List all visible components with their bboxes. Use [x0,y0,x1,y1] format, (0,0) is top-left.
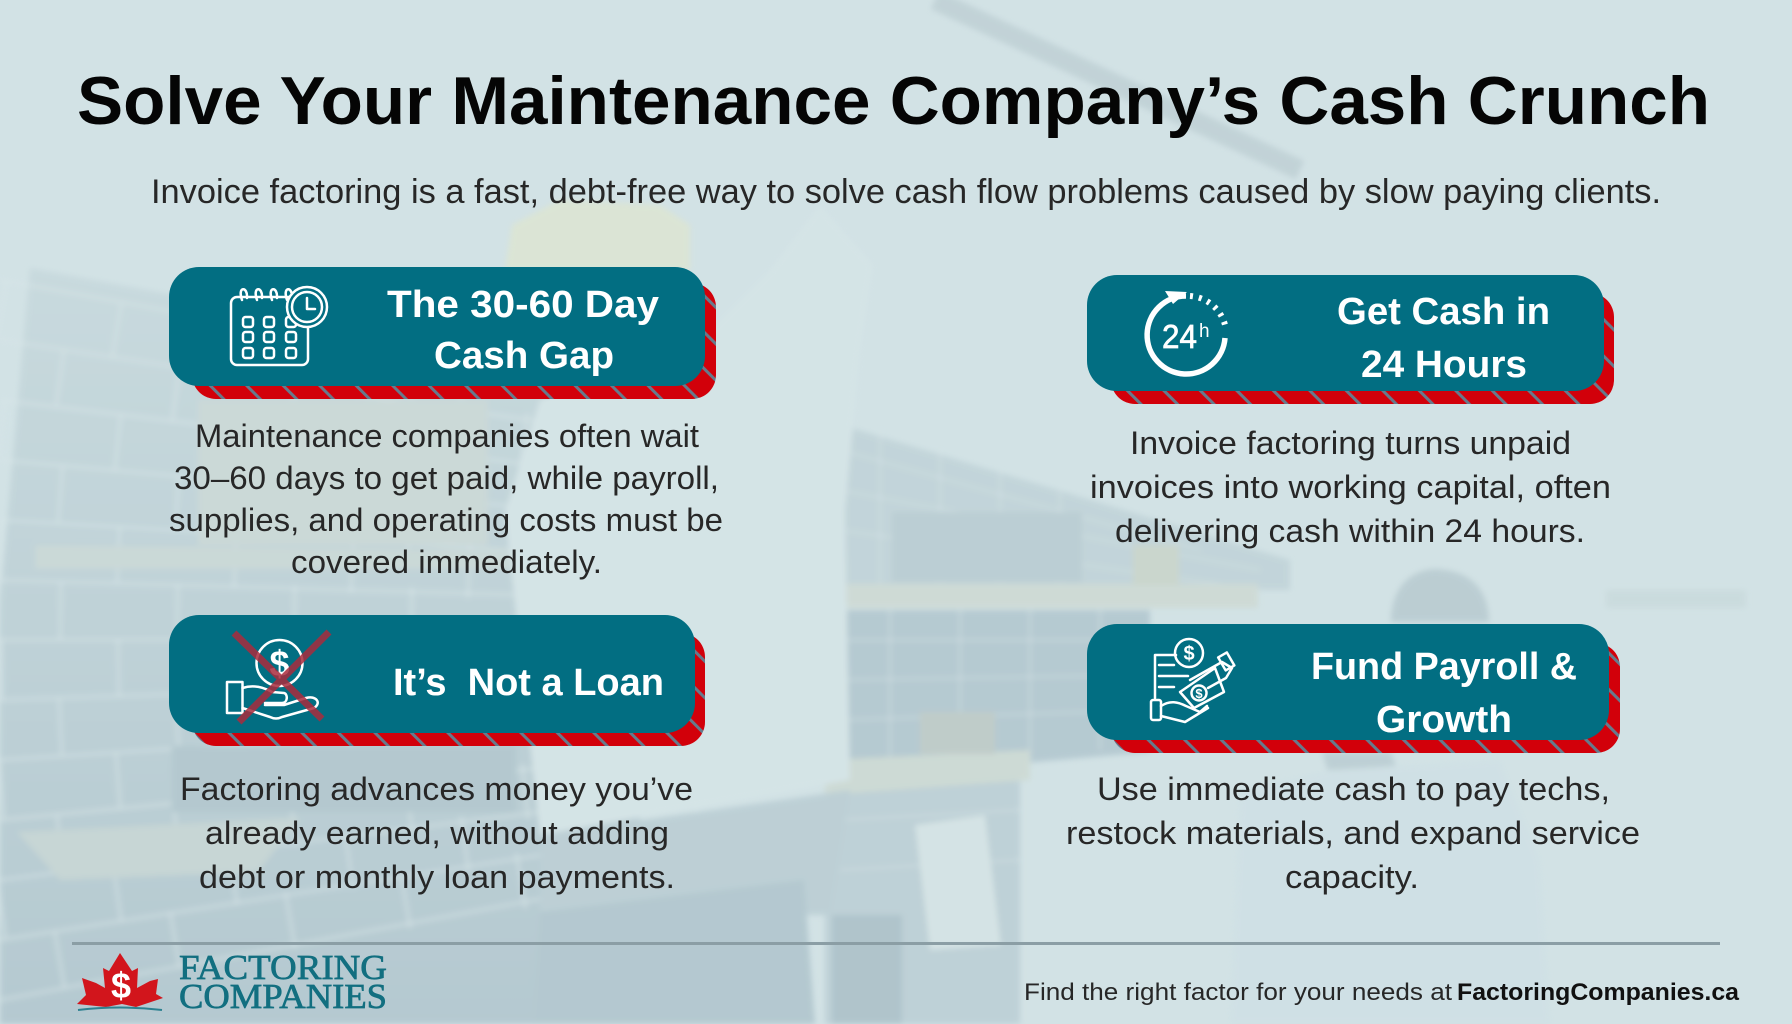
panel: get cash in 24 hours [1087,275,1614,404]
text block: fund payroll description [1066,771,1640,895]
text block: 30-60 day description: covered immediately. [291,544,602,580]
striped shadow 4 [1111,643,1620,753]
heading 2: Get Cash in [1337,291,1550,333]
text block: fund payroll description: restock materials, and expand service [1066,815,1640,851]
text block: fund payroll description: Use immediate cash to pay techs, [1097,771,1610,807]
pill 1 [169,267,705,386]
text block: 24 hours description [1090,425,1611,549]
text block: 30-60 day description: Maintenance companies often wait [195,418,699,454]
footer call to action [1024,979,1740,1006]
text block: not a loan description: Factoring advances money you’ve [180,771,693,807]
pill 4 [1087,624,1609,740]
logo wordmark [179,948,387,1016]
title: Solve Your Maintenance Company’s Cash Crunch [77,63,1710,139]
text block: 30-60 day description: supplies, and operating costs must be [169,502,723,538]
text block: not a loan description [180,771,693,895]
heading 4: Fund Payroll & [1311,646,1577,688]
panel: fund payroll and growth [1087,624,1620,753]
text block: 30-60 day description: 30–60 days to get paid, while payroll, [174,460,719,496]
pill 2 [1087,275,1604,391]
icon: crossed-out money in hand [227,632,329,722]
heading 2: 24 Hours [1361,344,1527,386]
icon: 24 hour clock: h [1199,321,1210,342]
heading 1 [387,284,659,377]
icon: crossed-out money in hand: $ [269,643,290,684]
logo wordmark: FACTORING [179,948,387,987]
subtitle: Invoice factoring is a fast, debt-free way to solve cash flow problems caused by slow paying clients. [151,173,1661,211]
icon: red maple leaf with dollar sign: $ [111,965,131,1006]
icon: invoice, money and hand [1151,639,1234,722]
heading 4: Growth [1376,699,1512,741]
icon: red maple leaf with dollar sign [77,953,163,1010]
heading 3: It’s Not a Loan [393,662,664,704]
text block: 24 hours description: delivering cash within 24 hours. [1115,513,1585,549]
logo wordmark: COMPANIES [179,977,387,1016]
icon: 24 hour clock: 24 [1162,318,1197,355]
heading 1: The 30-60 Day [387,284,659,326]
icon: invoice, money and hand: $ [1195,686,1203,701]
panel: it's not a loan [169,615,705,746]
text block: not a loan description: already earned, without adding [205,815,669,851]
icon: 24 hour clock [1147,291,1226,374]
heading 1: Cash Gap [434,335,614,377]
logo: factoring companies [77,948,387,1016]
text block: 30-60 day description [169,418,723,580]
text block: not a loan description: debt or monthly loan payments. [199,859,675,895]
striped shadow 3 [192,633,705,746]
footer call to action: Find the right factor for your needs at [1024,979,1452,1006]
heading 4 [1311,646,1577,741]
footer call to action: FactoringCompanies.ca [1457,979,1740,1006]
heading 2 [1337,291,1550,386]
striped shadow 2 [1111,293,1614,404]
pill 3 [169,615,695,733]
icon: calendar with clock [231,287,327,365]
text block: 24 hours description: Invoice factoring turns unpaid [1130,425,1571,461]
text block: 24 hours description: invoices into working capital, often [1090,469,1611,505]
panel: the 30-60 day cash gap [169,267,716,399]
icon: invoice, money and hand: $ [1183,643,1195,665]
footer divider [72,942,1720,945]
text block: fund payroll description: capacity. [1285,859,1419,895]
striped shadow 1 [192,283,716,399]
